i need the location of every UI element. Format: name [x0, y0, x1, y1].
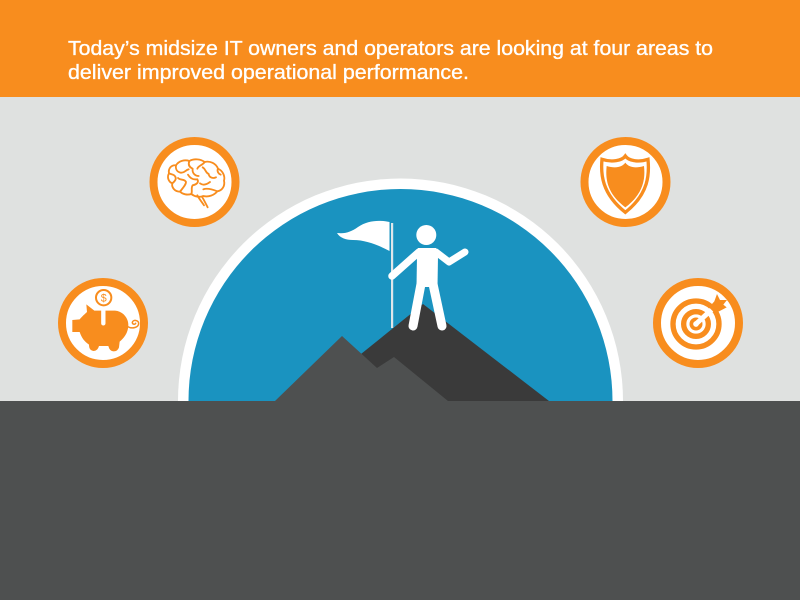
header banner	[0, 0, 800, 97]
person figure	[392, 225, 465, 326]
flag and pole	[337, 221, 393, 328]
icon: brain	[154, 141, 236, 223]
ground	[0, 401, 800, 600]
icon: piggy bank: $	[101, 293, 107, 305]
icon: target with arrow	[657, 282, 739, 364]
icon: shield	[584, 141, 666, 223]
heading text	[68, 37, 713, 84]
semicircle sky dome	[178, 178, 623, 600]
mountains	[275, 304, 549, 401]
heading text: Today’s midsize IT owners and operators are looking at four areas to	[68, 37, 713, 60]
heading text: deliver improved operational performance.	[68, 61, 469, 84]
icon: piggy bank	[62, 282, 144, 364]
